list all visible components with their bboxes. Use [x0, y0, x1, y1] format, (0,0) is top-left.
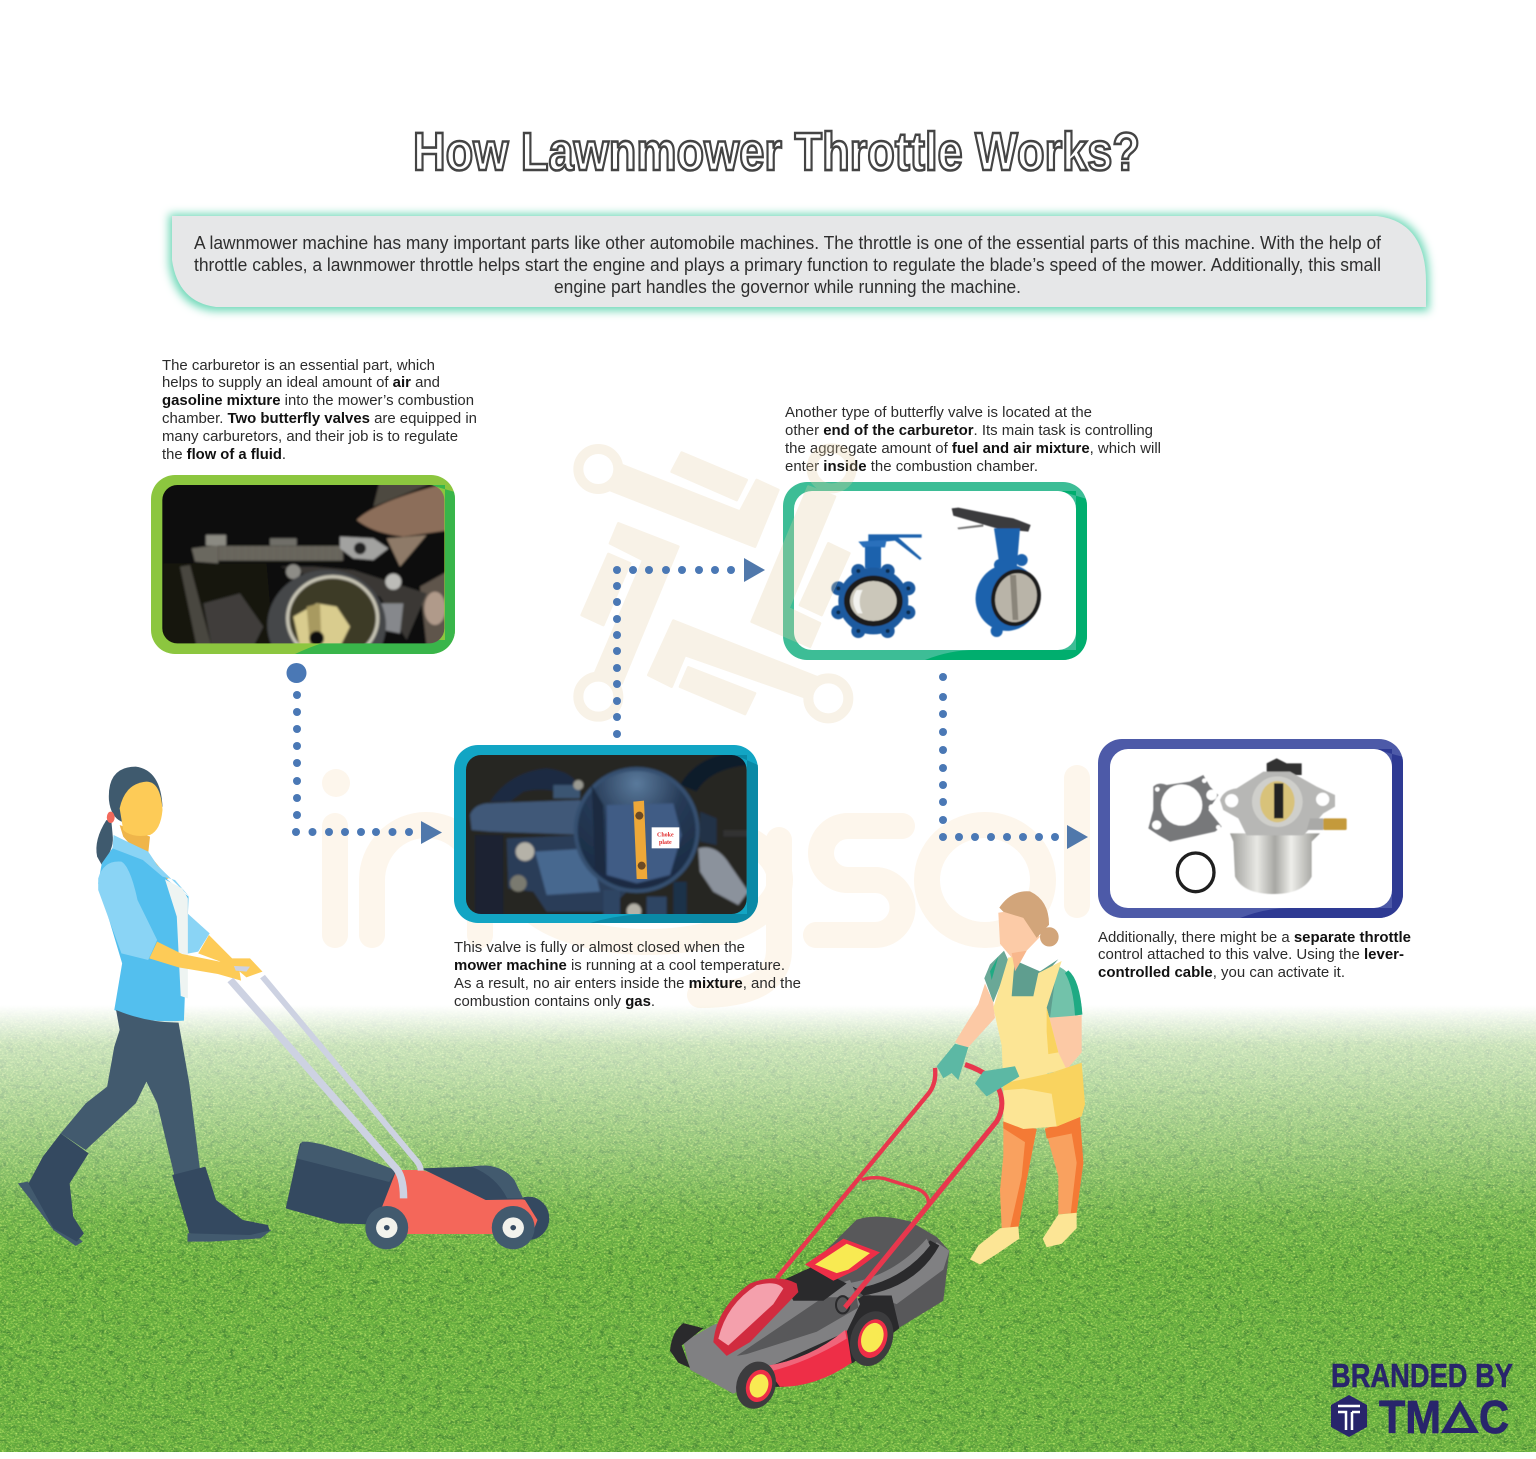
icon: TMAC hexagon [1331, 1395, 1367, 1437]
icon: lug butterfly valve [831, 534, 922, 638]
text block: separate throttle [1098, 929, 1411, 981]
text block: carburetor: the flow of a fluid. [162, 446, 286, 463]
text block: carburetor: chamber. Two butterfly valves are equipped in [162, 410, 477, 427]
card: carburetor kit photo [1098, 739, 1403, 918]
arrow: butterfly valves to carburetor kit [939, 673, 1088, 849]
arms [149, 935, 262, 981]
text block: separate throttle: control attached to this valve. Using the lever- [1098, 946, 1404, 963]
shoes [970, 1213, 1077, 1264]
logo: branded by TMAC: C [1479, 1391, 1509, 1443]
watermark: letters [322, 769, 1077, 995]
text block: second butterfly valve: the aggregate amount of fuel and air mixture, which will [785, 440, 1161, 457]
text block: carburetor: many carburetors, and their job is to regulate [162, 428, 458, 445]
mower [670, 1217, 949, 1415]
text block: carburetor: helps to supply an ideal amount of air and [162, 374, 440, 391]
watermark: wrench logo [578, 449, 848, 718]
logo: branded by TMAC [1331, 1357, 1513, 1443]
card: carburetor photo [151, 475, 455, 654]
card: butterfly valves photo [783, 482, 1087, 660]
red handle [777, 1064, 1002, 1308]
photo: choke plate: Choke [657, 833, 674, 839]
watermark overlay on valve card [752, 448, 852, 647]
text block: carburetor [162, 357, 477, 463]
boots [18, 1133, 271, 1246]
grass field [0, 1005, 1536, 1452]
icon: wafer butterfly valve [952, 508, 1047, 638]
hair [96, 767, 162, 865]
text block: second butterfly valve: Another type of butterfly valve is located at the [785, 404, 1092, 421]
text block: closed valve: This valve is fully or almost closed when the [454, 939, 745, 956]
card: choke plate photo [454, 745, 758, 923]
icon: carburetor [1220, 758, 1347, 894]
intro text: throttle cables, a lawnmower throttle helps start the engine and plays a primary function to regulate the blade’s speed of the mower. Additionally, this small [194, 255, 1381, 275]
logo: branded by TMAC: TM [1379, 1391, 1441, 1443]
intro text: engine part handles the governor while running the machine. [554, 277, 1021, 297]
text block: separate throttle: Additionally, there might be a separate throttle [1098, 929, 1411, 946]
text block: carburetor: The carburetor is an essential part, which [162, 357, 435, 374]
icon: gasket [1148, 775, 1222, 842]
text block: carburetor: gasoline mixture into the mower’s combustion [162, 392, 474, 409]
illustration: woman pushing side-view mower [18, 767, 549, 1249]
photo: choke plate: plate [659, 840, 672, 846]
icon: triangle letter [1441, 1400, 1479, 1433]
text block: closed valve: combustion contains only gas. [454, 993, 655, 1010]
trousers [61, 1010, 200, 1178]
text block: second butterfly valve: enter inside the combustion chamber. [785, 458, 1038, 475]
text block: separate throttle: controlled cable, you can activate it. [1098, 964, 1345, 981]
skin arms [955, 983, 1082, 1078]
intro text: A lawnmower machine has many important parts like other automobile machines. The throttle is one of the essential parts of this machine. With the help of [194, 233, 1382, 253]
photo: carburetor linkage [162, 485, 444, 644]
text block: second butterfly valve: other end of the carburetor. Its main task is controlling [785, 422, 1153, 439]
title: How Lawnmower Throttle Works? [413, 122, 1140, 182]
text block: second butterfly valve [785, 404, 1161, 475]
text block: closed valve: mower machine is running at a cool temperature. [454, 957, 785, 974]
photo: choke plate [466, 755, 747, 914]
icon: o-ring [1177, 853, 1214, 892]
arrow: carburetor to choke valve [286, 663, 442, 844]
arrow: choke valve to butterfly valves [613, 558, 765, 738]
intro text [194, 233, 1382, 297]
text block: closed valve: As a result, no air enters inside the mixture, and the [454, 975, 801, 992]
mower [230, 977, 549, 1249]
gloves [937, 1044, 1019, 1097]
illustration: woman pushing isometric mower [670, 891, 1085, 1415]
apron [993, 957, 1085, 1129]
legs [1000, 1116, 1083, 1228]
text block: closed valve [454, 939, 801, 1010]
head [998, 891, 1059, 971]
torso [98, 782, 210, 1021]
shirt [984, 951, 1082, 1020]
panel: introduction [172, 216, 1426, 307]
